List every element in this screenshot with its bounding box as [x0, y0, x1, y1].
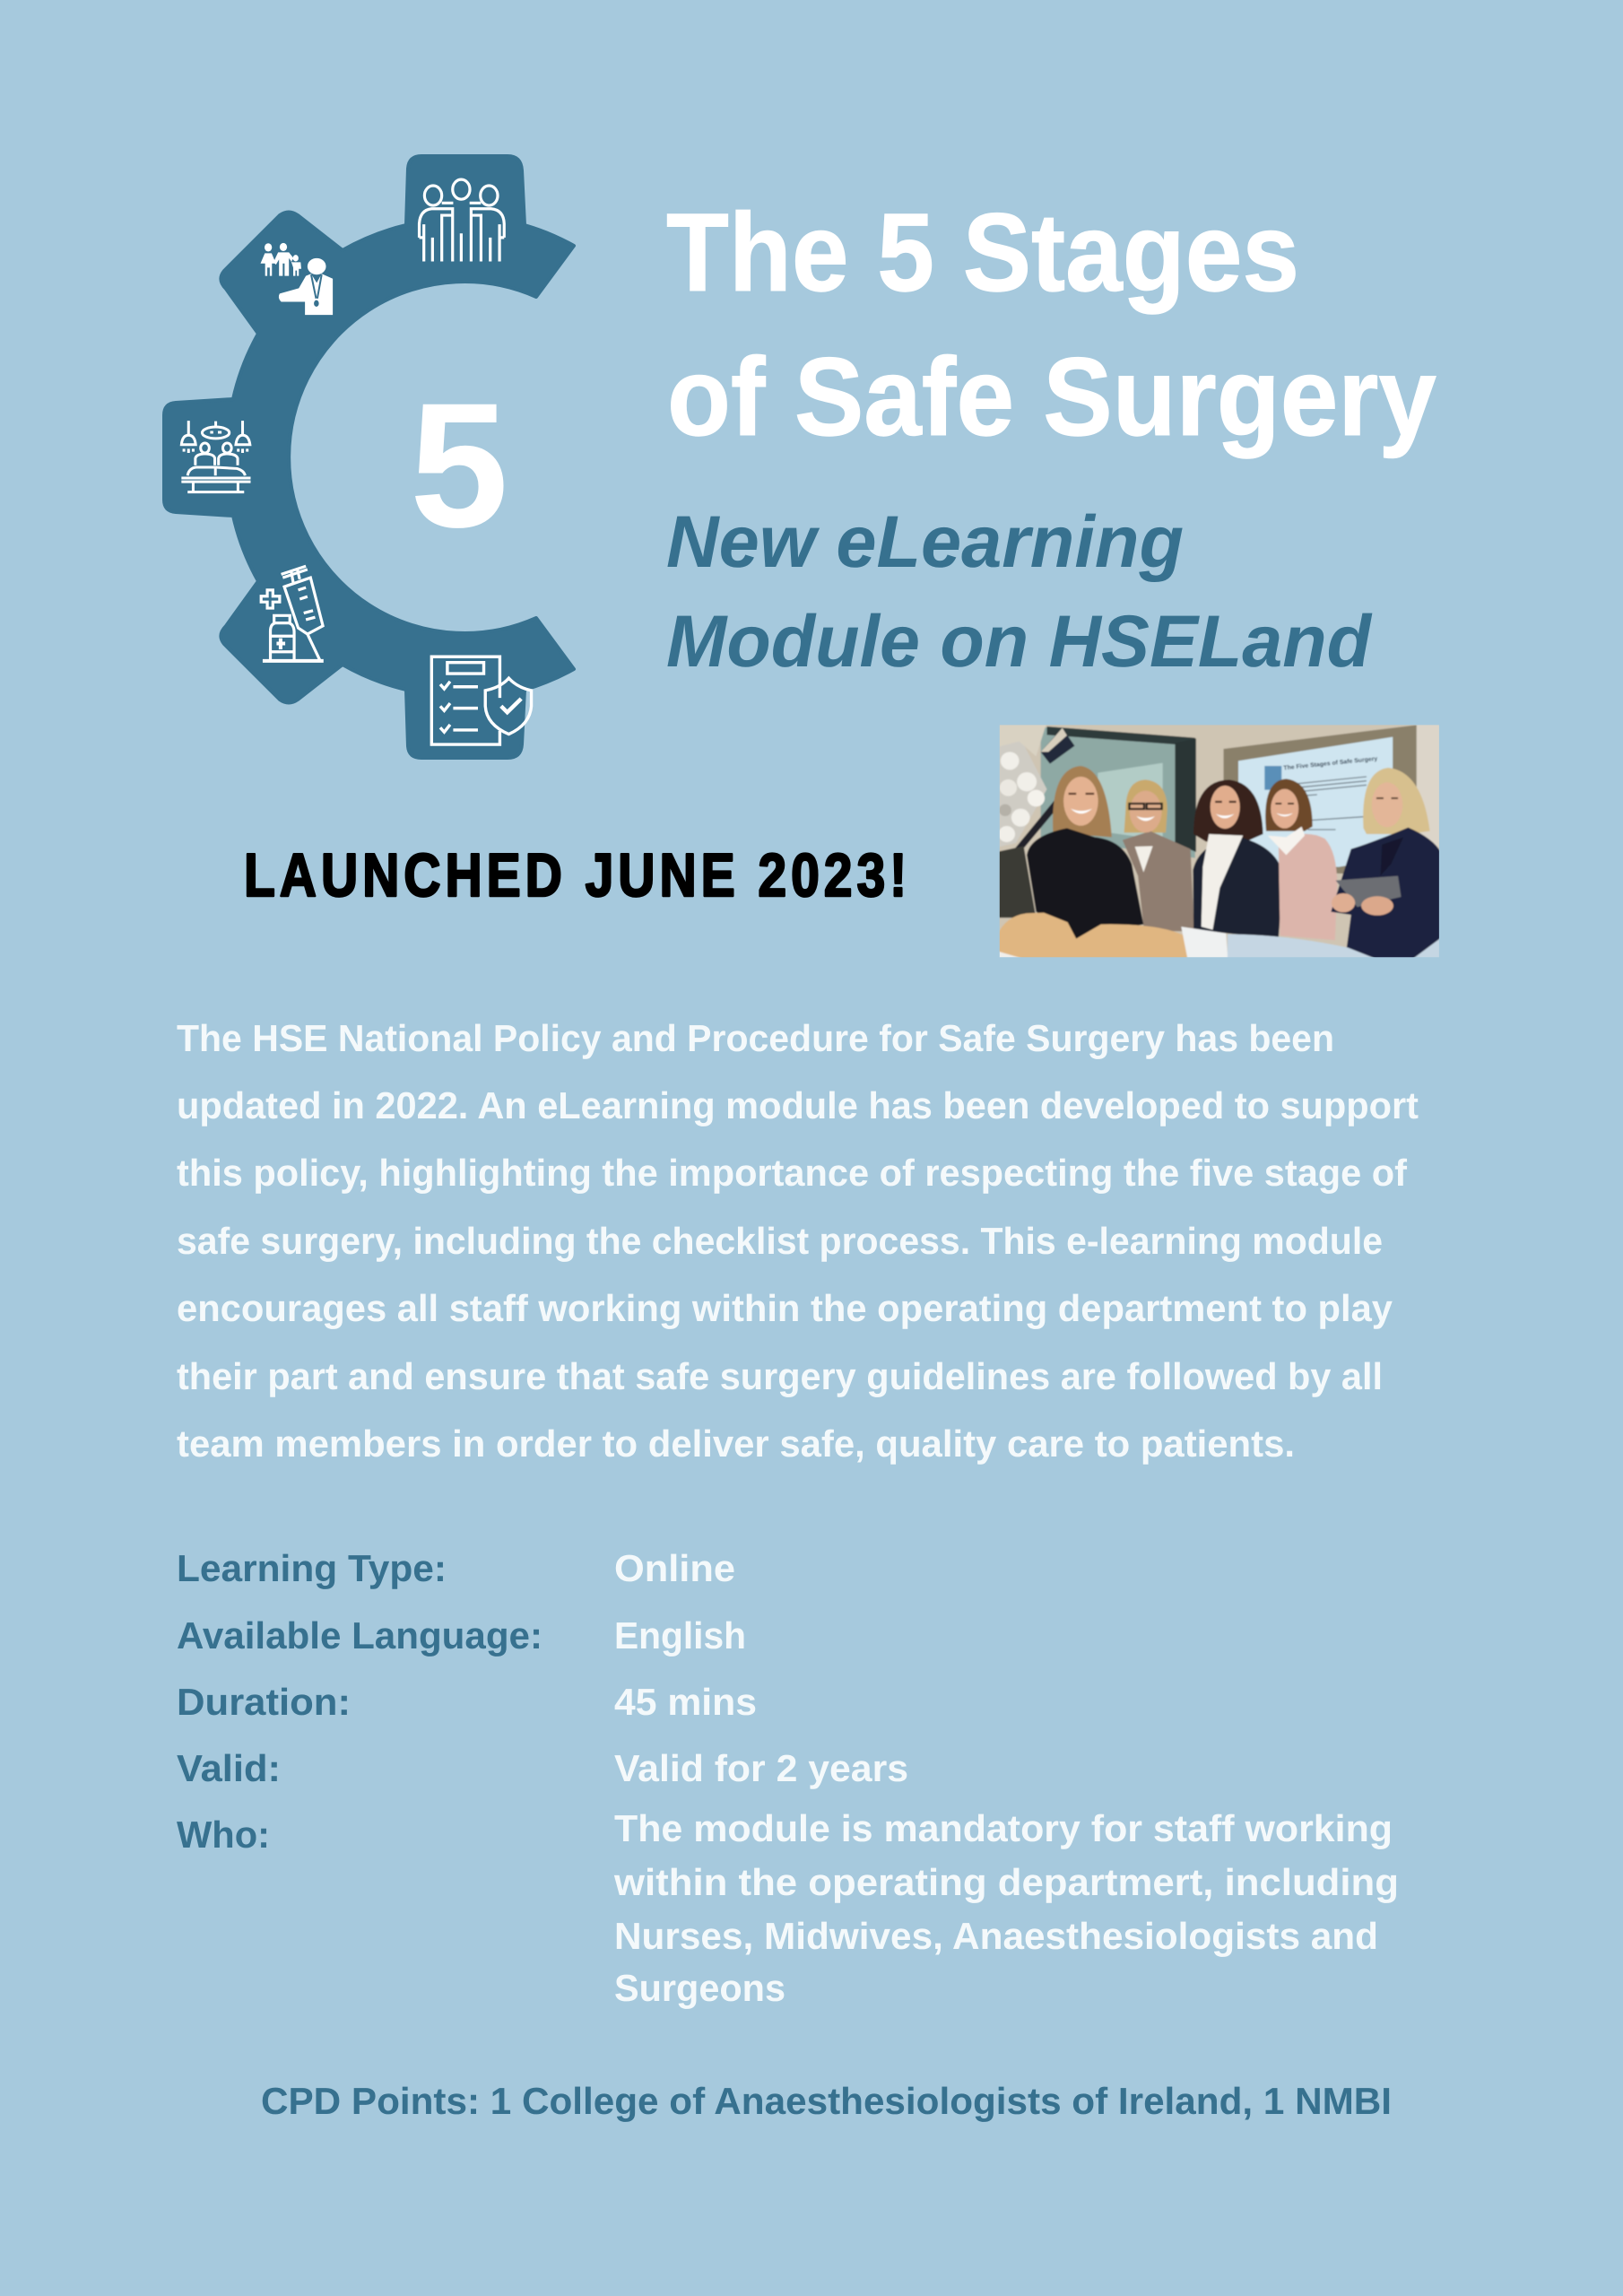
icon: syringe and medicine bottle: [261, 566, 324, 661]
title: of Safe Surgery: [667, 335, 1436, 459]
photo: team of five women with training mannequin: The Five Stages of Safe Surgery: [1283, 755, 1378, 771]
course details values: Valid for 2 years: [614, 1747, 908, 1789]
launch date banner: LAUNCHED JUNE 2023!: [244, 841, 907, 909]
course details values: within the operating departmert, including: [613, 1861, 1399, 1903]
course details labels: Who:: [177, 1813, 270, 1856]
course details labels: Available Language:: [177, 1614, 542, 1657]
course details values: Online: [614, 1547, 735, 1589]
course details labels: Learning Type:: [177, 1547, 447, 1589]
course details labels: [177, 1547, 542, 1856]
photo: team of five women with training mannequin: [996, 722, 1444, 961]
icon: doctor with family: [261, 243, 333, 315]
course details values: [613, 1547, 1399, 2009]
number 5: 5: [410, 366, 508, 564]
intro paragraph: encourages all staff working within the operating department to play: [177, 1287, 1393, 1329]
subtitle: [666, 501, 1373, 683]
poster: [162, 154, 1439, 2122]
title: [666, 191, 1436, 459]
intro paragraph: this policy, highlighting the importance of respecting the five stage of: [177, 1152, 1408, 1194]
intro paragraph: team members in order to deliver safe, quality care to patients.: [177, 1422, 1295, 1465]
intro paragraph: The HSE National Policy and Procedure for Safe Surgery has been: [177, 1017, 1334, 1059]
course details labels: Valid:: [177, 1747, 281, 1789]
course details labels: Duration:: [177, 1681, 351, 1723]
intro paragraph: updated in 2022. An eLearning module has been developed to support: [177, 1084, 1419, 1126]
title: The 5 Stages: [666, 191, 1299, 315]
CPD points footer: CPD Points: 1 College of Anaesthesiologists of Ireland, 1 NMBI: [261, 2080, 1392, 2122]
course details values: The module is mandatory for staff working: [614, 1807, 1393, 1849]
gear ring shape: [164, 156, 574, 758]
icon: surgical team: [420, 179, 504, 262]
icon: operating theatre: [181, 421, 250, 492]
course details values: English: [614, 1614, 746, 1657]
course details values: 45 mins: [614, 1681, 757, 1723]
subtitle: New eLearning: [666, 501, 1184, 583]
intro paragraph: safe surgery, including the checklist process. This e-learning module: [177, 1220, 1383, 1262]
gear graphic: [164, 156, 574, 758]
intro paragraph: their part and ensure that safe surgery guidelines are followed by all: [177, 1355, 1383, 1397]
subtitle: Module on HSELand: [666, 601, 1373, 683]
icon: checklist and shield: [431, 657, 532, 744]
course details values: Surgeons: [614, 1967, 785, 2009]
course details values: Nurses, Midwives, Anaesthesiologists and: [614, 1915, 1378, 1957]
intro paragraph: [177, 1017, 1419, 1465]
